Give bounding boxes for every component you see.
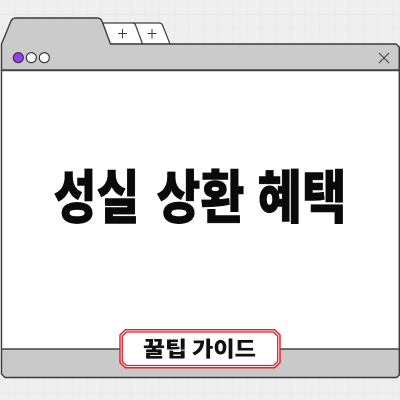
window buttons (13, 53, 49, 63)
browser tabs (100, 23, 170, 44)
tab 1 (100, 23, 142, 44)
badge label: 가이드 (192, 338, 256, 362)
footer bar (2, 349, 399, 378)
title (54, 166, 346, 231)
badge: tip guide (120, 330, 280, 368)
title: 혜택 (258, 166, 346, 231)
white button (39, 53, 49, 63)
content area (2, 70, 399, 349)
purple button (13, 53, 23, 63)
tab 2 (133, 23, 170, 44)
badge label (143, 338, 256, 362)
icon: close (379, 53, 389, 63)
white button (26, 53, 36, 63)
title: 상환 (156, 166, 244, 231)
badge label: 꿀팁 (143, 338, 187, 362)
title bar (2, 18, 399, 70)
title: 성실 (54, 166, 140, 231)
